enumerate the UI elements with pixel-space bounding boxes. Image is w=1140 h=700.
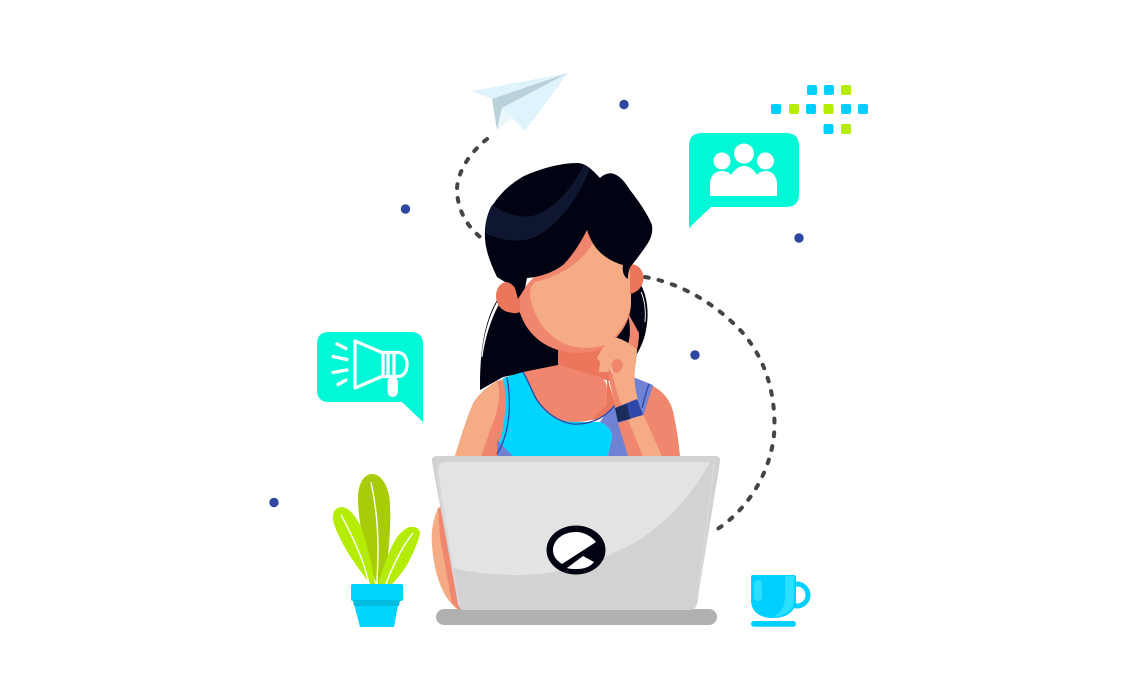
mug shine [773, 576, 794, 617]
dashed path: plane trail [457, 139, 487, 240]
face [517, 228, 631, 353]
speech bubble: people [689, 133, 799, 228]
icon: group of people [710, 144, 777, 196]
forearm [608, 373, 643, 456]
center leaf [358, 474, 390, 584]
left leg [432, 500, 470, 609]
screen reflection [438, 462, 710, 575]
ears [496, 282, 520, 313]
left leaf [333, 507, 375, 584]
mug saucer [751, 621, 796, 627]
mug body [751, 575, 796, 618]
laptop edge highlights [437, 464, 714, 606]
mug handle [786, 584, 808, 606]
person [432, 163, 680, 609]
strap lines [497, 372, 649, 454]
hand [597, 337, 638, 408]
right shoulder [625, 386, 680, 456]
watch [615, 399, 643, 422]
leaf veins [341, 482, 413, 584]
hair sheen [485, 165, 590, 241]
hair highlight lines [482, 303, 498, 357]
dashed path: right trail [645, 277, 775, 530]
decorative dots [269, 100, 804, 507]
pot [353, 600, 399, 627]
finger [628, 313, 639, 351]
laptop logo [546, 526, 606, 574]
icon: paper plane [472, 73, 568, 131]
laptop [432, 456, 720, 610]
front hair [485, 163, 652, 299]
right leaf [378, 527, 420, 584]
icon: megaphone [333, 341, 407, 397]
speech bubble: megaphone [317, 332, 423, 422]
plant [333, 474, 420, 627]
palm fold [612, 359, 623, 373]
back hair [480, 270, 648, 390]
chest [523, 365, 607, 422]
laptop base [436, 609, 717, 625]
tank top shade [497, 377, 653, 456]
dot grid [771, 85, 868, 134]
coffee mug [751, 575, 808, 627]
left arm [455, 376, 516, 456]
tank top [498, 372, 612, 456]
neck [558, 345, 612, 382]
